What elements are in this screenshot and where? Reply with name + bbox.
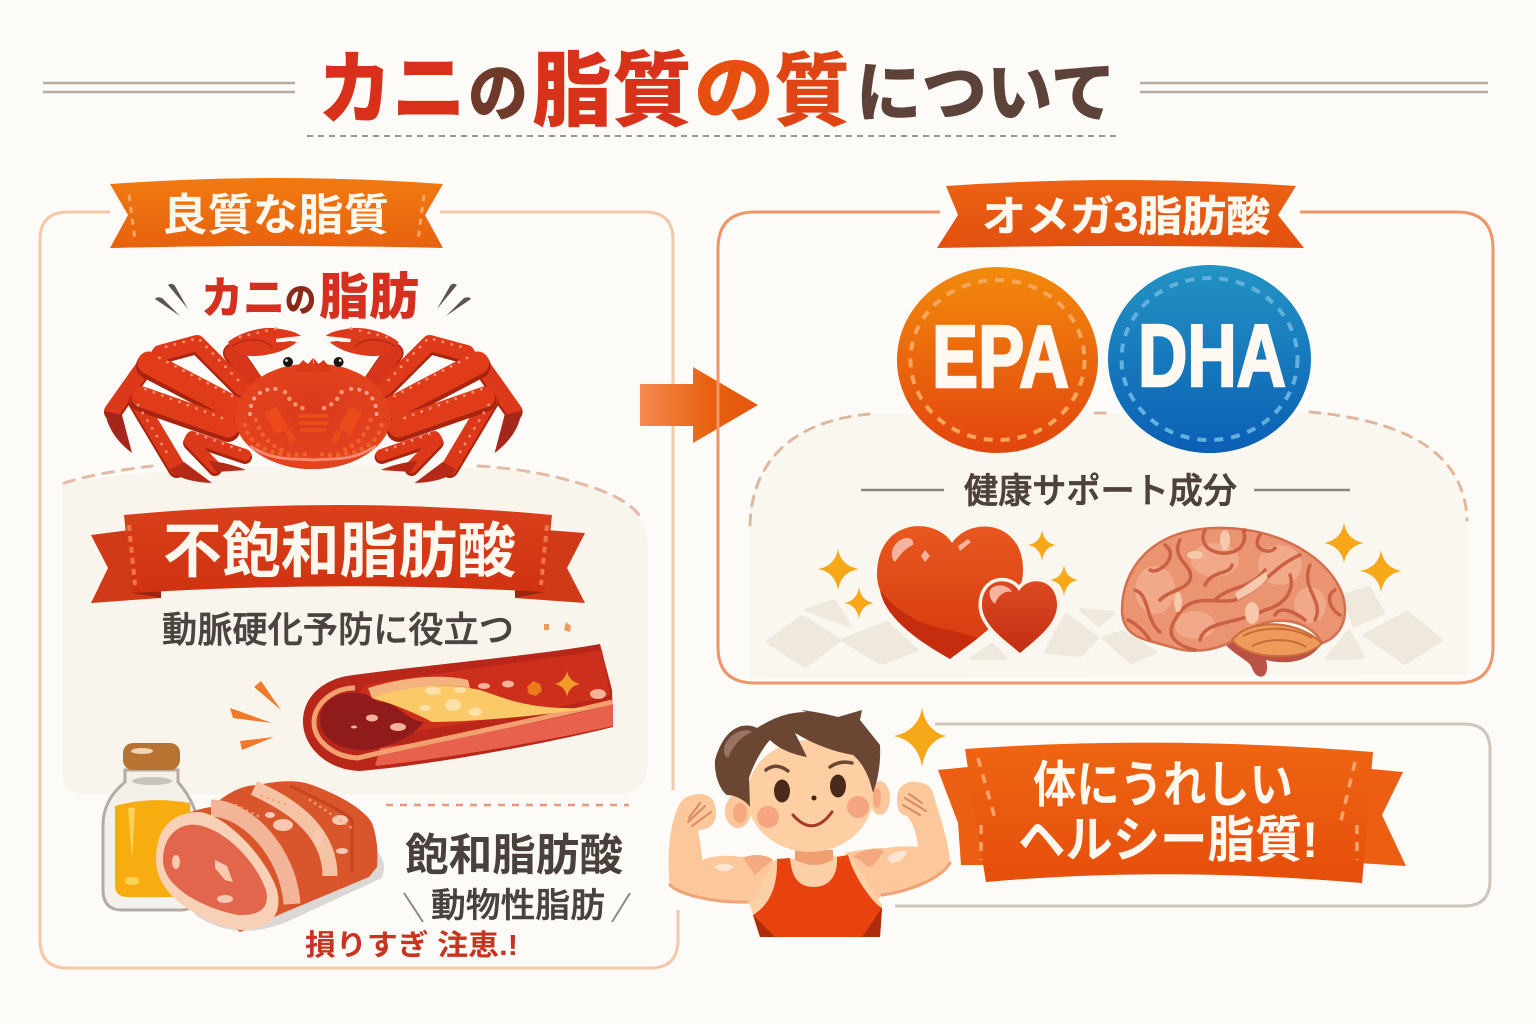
badge: EPA xyxy=(897,267,1098,453)
face xyxy=(747,740,873,852)
heading ribbon: オメガ3脂肪酸 xyxy=(937,180,1304,248)
tank top xyxy=(753,855,882,937)
badge: DHA: DHA xyxy=(1138,306,1286,405)
small accent marks xyxy=(544,622,571,632)
text: 動脈硬化予防に役立つ: 動脈硬化予防に役立つ xyxy=(162,609,514,650)
title xyxy=(318,45,1116,137)
neck xyxy=(795,850,833,865)
ribbon: ヘルシー脂質 xyxy=(938,743,1406,883)
icon: crab xyxy=(105,328,522,483)
icon: hearts xyxy=(877,526,1057,659)
subheading: カニの脂肪 xyxy=(201,269,419,325)
ribbon: 不飽和脂肪酸 xyxy=(91,505,585,603)
cream sub-panel dashed edge xyxy=(750,412,1467,525)
left panel frame xyxy=(40,212,678,968)
title: カニ xyxy=(318,45,466,134)
text: 健康サポート成分: 健康サポート成分 xyxy=(964,472,1237,511)
arrow xyxy=(640,367,758,443)
fist lines xyxy=(688,794,926,826)
nose xyxy=(812,796,816,800)
icon: artery xyxy=(303,644,613,771)
icon: sparkle xyxy=(894,708,946,767)
heading ribbon: 良質な脂質: 良質な脂質 xyxy=(162,191,389,240)
title: 脂質 xyxy=(532,46,692,137)
background tiles xyxy=(768,588,1441,666)
title: 質 xyxy=(774,47,850,136)
arm shading xyxy=(670,863,950,902)
badge: EPA: EPA xyxy=(932,307,1069,406)
title: の xyxy=(468,58,528,130)
icon: meat xyxy=(156,781,384,932)
eyes xyxy=(774,780,790,802)
text: 動物性脂肪: 動物性脂肪 xyxy=(431,887,605,925)
torso xyxy=(750,855,882,937)
burst marks xyxy=(155,284,471,316)
eyebrows xyxy=(766,762,852,771)
icon: oil bottle xyxy=(103,743,200,910)
mouth xyxy=(793,812,832,826)
cheeks xyxy=(757,806,779,828)
ears xyxy=(725,781,890,828)
text: 飽和脂肪酸: 飽和脂肪酸 xyxy=(405,831,623,880)
panel: healthy fat message xyxy=(669,708,1490,937)
title: の xyxy=(694,49,774,132)
icon: burst lines xyxy=(230,681,281,750)
warning text: 損りすぎ 注恵.! xyxy=(305,929,518,962)
badge: DHA xyxy=(1108,265,1311,453)
ribbon: 不飽和脂肪酸: 不飽和脂肪酸 xyxy=(163,518,516,585)
cream sub-panel xyxy=(750,412,1467,678)
panel: omega 3 xyxy=(718,180,1493,683)
heading ribbon: オメガ3脂肪酸: オメガ3脂肪酸 xyxy=(982,193,1270,240)
ribbon: ヘルシー脂質: ヘルシー脂質! xyxy=(1018,812,1318,868)
cream sub-panel xyxy=(62,465,648,795)
right arm xyxy=(845,782,950,908)
message frame xyxy=(895,724,1490,906)
illustration: flexing child xyxy=(669,710,950,937)
title rules xyxy=(43,83,1488,136)
left arm xyxy=(669,794,775,913)
title: について xyxy=(856,56,1116,130)
cream sub-panel dashed edge xyxy=(64,466,642,520)
panel: left good fats xyxy=(40,178,678,968)
icon: brain xyxy=(1122,528,1345,677)
shoulder shading xyxy=(743,849,884,875)
subheading: カニの脂肪: 脂肪 xyxy=(319,269,419,325)
dashed divider xyxy=(386,804,629,806)
ribbon: ヘルシー脂質: 体にうれしい xyxy=(1033,757,1293,813)
sparkles xyxy=(818,523,1402,619)
subheading: カニの脂肪: カニ xyxy=(201,274,285,323)
right panel frame xyxy=(718,212,1493,683)
subheading: カニの脂肪: の xyxy=(285,282,316,320)
arm highlights xyxy=(714,851,907,872)
hair xyxy=(715,710,880,807)
heading ribbon: 良質な脂質 xyxy=(110,178,443,248)
hair bun highlight xyxy=(724,730,752,758)
